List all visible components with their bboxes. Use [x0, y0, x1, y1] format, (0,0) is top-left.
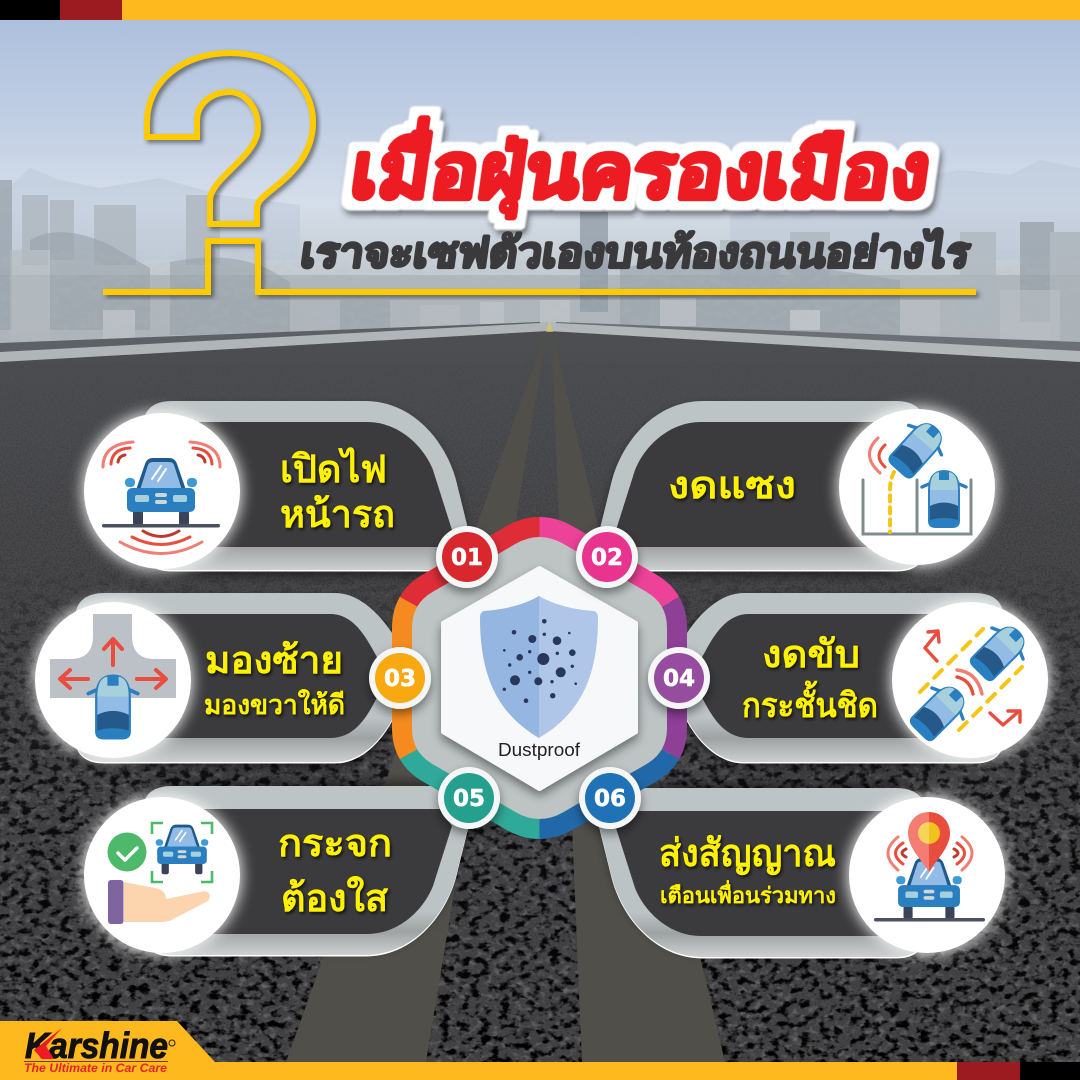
card shape	[596, 788, 925, 958]
label: หน้ารถ	[280, 494, 395, 536]
badge 06	[579, 767, 641, 829]
badge 05	[438, 767, 500, 829]
central hexagon hub	[402, 527, 677, 829]
card shape	[143, 786, 472, 956]
icon 04: cars keeping distance	[890, 600, 1050, 760]
icon 02: overtaking parking cars	[837, 407, 997, 567]
label: กระชั้นชิด	[742, 680, 878, 725]
label: ต้องใส	[281, 876, 389, 920]
card shape	[143, 401, 472, 572]
logo: Karshine: Karshine	[25, 1025, 168, 1066]
label: มองซ้าย	[205, 640, 343, 682]
road lane stripes	[286, 320, 725, 1062]
bottom color bar	[0, 1062, 1080, 1080]
label: กระจก	[278, 823, 392, 865]
panel 02: no overtaking	[596, 401, 925, 572]
badge 01: 01	[451, 545, 483, 571]
panel 01: headlights	[143, 401, 472, 572]
background: hazy sky	[0, 0, 1080, 370]
title underline with question mark dot	[103, 241, 976, 292]
logo: Karshine: The Ultimate in Car Care	[24, 1063, 168, 1075]
label	[659, 833, 836, 908]
label	[742, 634, 878, 725]
dustproof caption: Dustproof	[498, 740, 581, 760]
background: city skyline	[0, 180, 1080, 370]
road surface	[0, 325, 1080, 1062]
logo: Karshine	[0, 1021, 215, 1080]
badge 05: 05	[453, 786, 485, 812]
icon 01: car with headlight waves	[82, 411, 242, 571]
badge 06: 06	[594, 786, 626, 812]
label	[278, 823, 392, 920]
badge 02: 02	[591, 545, 623, 571]
badge 01	[436, 526, 498, 588]
panel 04: no tailgating	[659, 593, 1004, 764]
grey hexagon base	[402, 527, 677, 829]
label	[280, 447, 395, 536]
panel 03: look left and right	[75, 593, 420, 764]
question mark outline	[147, 53, 313, 224]
label: เปิดไฟ	[280, 447, 387, 491]
badge 04: 04	[663, 666, 695, 692]
card shape	[659, 593, 1004, 764]
badge 03: 03	[384, 666, 416, 692]
icon 03: car at junction with arrows	[33, 600, 193, 760]
top color bar	[0, 0, 1080, 20]
label: เตือนเพื่อนร่วมทาง	[660, 879, 836, 908]
coloured ring	[402, 527, 677, 829]
card shape	[75, 593, 420, 764]
label: ส่งสัญญาณ	[659, 833, 836, 875]
title: เมื่อฝุ่นครองเมือง	[345, 117, 937, 219]
label: งดแซง	[668, 465, 796, 507]
icon 06: car with location pin and signal waves	[847, 795, 1007, 955]
badge 03	[369, 647, 431, 709]
badge 04	[648, 647, 710, 709]
icon 05: check mark, car and open hand	[82, 795, 242, 955]
label: มองขวาให้ดี	[204, 689, 345, 720]
panel 06: signal to other drivers	[596, 788, 925, 958]
panel 05: clear windshield	[143, 786, 472, 956]
subtitle: เราจะเซฟตัวเองบนท้องถนนอย่างไร	[298, 228, 974, 276]
icon: dust shield	[480, 596, 598, 738]
white hexagon	[443, 568, 636, 789]
road shoulder left and right	[0, 322, 1080, 362]
label	[204, 640, 345, 720]
background: distant mountains	[0, 160, 1080, 260]
card shape	[596, 401, 925, 572]
badge 02	[576, 526, 638, 588]
label: งดขับ	[762, 634, 860, 676]
